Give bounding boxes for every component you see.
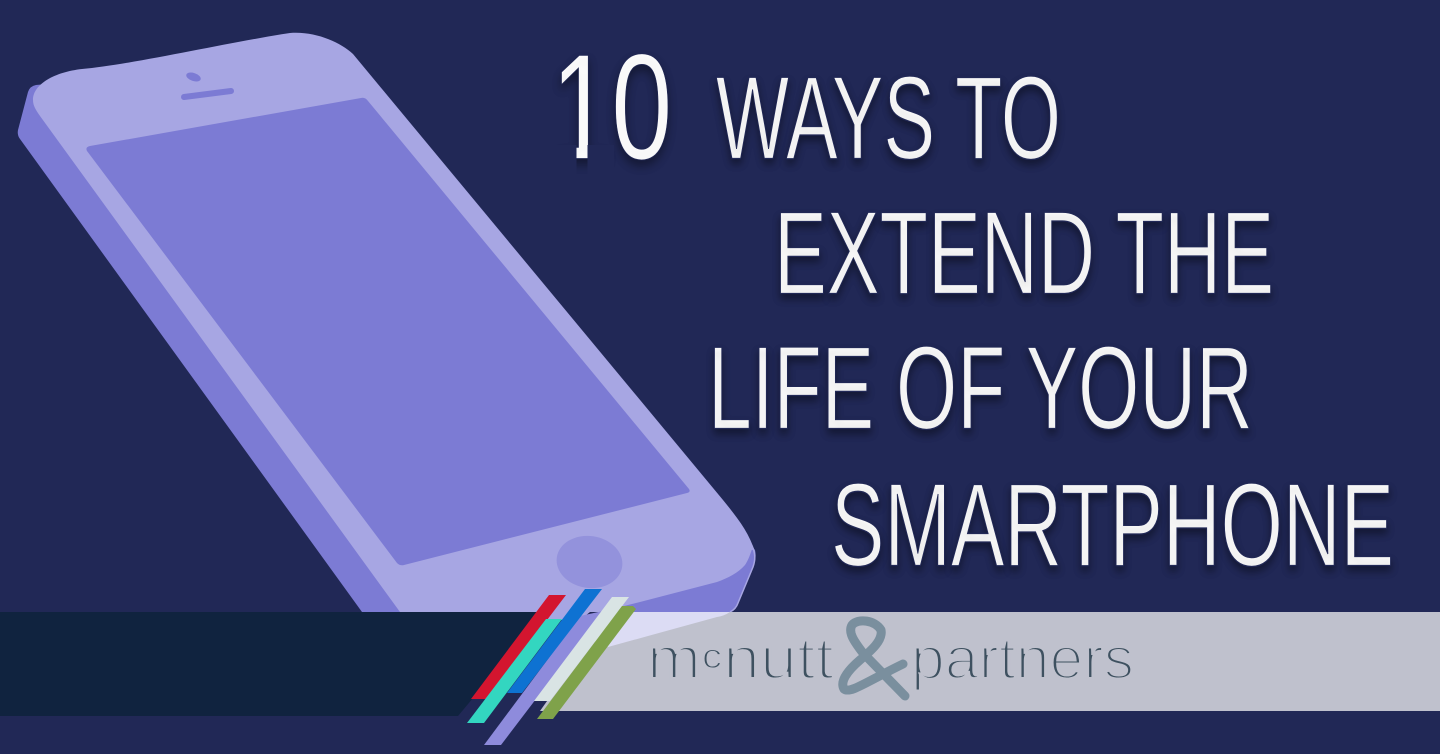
home button	[553, 532, 626, 592]
phone face	[33, 33, 755, 620]
dark band	[0, 612, 545, 716]
phone seen through band	[590, 612, 730, 647]
logo text: m: m	[647, 626, 701, 692]
phone rim	[730, 546, 755, 612]
green stripe	[537, 606, 636, 719]
grey logo band	[540, 612, 1440, 711]
screen	[86, 98, 690, 565]
camera	[185, 71, 202, 83]
title line: ways to: WAYS TO	[716, 53, 1061, 185]
phone side	[18, 60, 756, 612]
speaker	[184, 91, 231, 97]
logo: mcnutt & partners	[647, 621, 1134, 696]
icon: smartphone	[18, 33, 756, 620]
purple stripe	[484, 611, 603, 745]
icon: ampersand	[843, 621, 905, 696]
title number: 10: 10	[551, 23, 672, 190]
logo text: partners: partners	[911, 626, 1134, 692]
red stripe	[471, 595, 566, 699]
blue stripe	[507, 589, 602, 693]
logo text: superscript c: c	[702, 637, 722, 676]
logo text: nutt: nutt	[723, 626, 834, 692]
logo stripes	[467, 589, 636, 745]
teal stripe	[467, 619, 562, 723]
pale stripe	[534, 597, 629, 701]
title	[551, 23, 1394, 592]
